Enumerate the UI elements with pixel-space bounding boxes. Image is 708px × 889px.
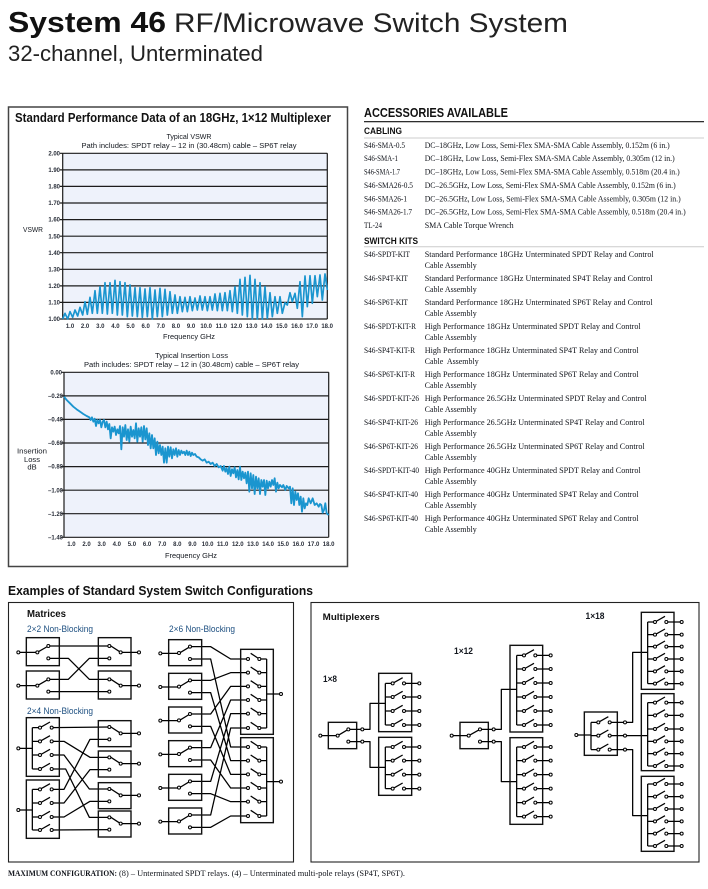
diagram: 1x12 multiplexer <box>450 645 552 824</box>
diagram: 1x8 multiplexer <box>319 673 421 795</box>
switch kits section: High Performance 26.5GHz Unterminated SP4T Relay and Control <box>425 417 645 427</box>
cabling section: DC–18GHz, Low Loss, Semi-Flex SMA-SMA Cable Assembly, 0.305m (12 in.) <box>425 153 675 163</box>
switch kits section: High Performance 40GHz Unterminated SPDT Relay and Control <box>425 465 641 475</box>
switch kits section: High Performance 26.5GHz Unterminated SP6T Relay and Control <box>425 441 645 451</box>
chart: typical VSWR: 11.0 <box>216 324 228 330</box>
chart: typical insertion loss: –1.00 <box>48 488 64 494</box>
chart: typical VSWR: 3.0 <box>96 324 105 330</box>
footnote: maximum configuration: MAXIMUM CONFIGURATION: <box>8 868 117 878</box>
chart: typical VSWR: 14.0 <box>261 324 273 330</box>
diagram: 1x18 multiplexer: 1×18 <box>586 611 604 621</box>
chart: typical VSWR: 1.10 <box>48 300 61 306</box>
chart: typical VSWR: 1.60 <box>48 218 61 224</box>
switch kits section: High Performance 40GHz Unterminated SP6T Relay and Control <box>425 513 639 523</box>
chart: typical VSWR: 5.0 <box>126 324 135 330</box>
chart: typical insertion loss: 17.0 <box>308 542 320 548</box>
cabling section: S46-SMA-1.7 <box>364 166 400 176</box>
switch kits section: Cable Assembly <box>425 332 477 342</box>
switch kits section: S46-SP6T-KIT-40 <box>364 513 418 523</box>
chart: typical insertion loss: 13.0 <box>247 542 259 548</box>
chart: typical insertion loss: 14.0 <box>262 542 275 548</box>
chart: typical insertion loss <box>17 351 335 560</box>
switch kits section: High Performance 18GHz Unterminated SP6T Relay and Control <box>425 369 639 379</box>
switch kits section: Cable Assembly <box>425 500 477 510</box>
chart: typical VSWR: 1.50 <box>48 234 61 240</box>
switch kits section: Cable Assembly <box>425 284 477 294</box>
diagram: 2x2 non-blocking: 2×2 Non-Blocking <box>27 624 93 634</box>
cabling section: DC–26.5GHz, Low Loss, Semi-Flex SMA-SMA Cable Assembly, 0.305m (12 in.) <box>425 194 681 204</box>
switch kits section: Cable Assembly <box>425 428 477 438</box>
chart: typical insertion loss: 8.0 <box>173 542 182 548</box>
switch kits section: Cable Assembly <box>425 452 477 462</box>
chart: typical insertion loss: 6.0 <box>143 542 152 548</box>
switch kits section: S46-SPDT-KIT <box>364 249 411 259</box>
chart: typical insertion loss: 0.00 <box>50 370 63 376</box>
chart: typical insertion loss: –0.20 <box>48 394 64 400</box>
panel: accessories available <box>364 106 704 534</box>
cabling section: S46-SMA26-1 <box>364 194 407 204</box>
chart: typical insertion loss: 7.0 <box>158 542 167 548</box>
title: RF/Microwave Switch System <box>174 8 568 38</box>
chart: typical VSWR: 1.80 <box>48 184 61 190</box>
switch kits section: S46-SP6T-KIT-26 <box>364 441 418 451</box>
chart: typical insertion loss: Typical Insertion Loss <box>155 351 228 360</box>
chart: typical insertion loss: 5.0 <box>128 542 137 548</box>
panel heading: Standard Performance Data of an 18GHz, 1×12 Multiplexer <box>15 111 331 125</box>
switch kits section: S46-SPDT-KIT-26 <box>364 393 419 403</box>
cabling section: SMA Cable Torque Wrench <box>425 220 514 230</box>
diagram: 1x8 multiplexer: 1×8 <box>323 674 337 684</box>
chart: typical insertion loss: 10.0 <box>202 542 214 548</box>
chart: typical insertion loss: Frequency GHz <box>165 551 217 560</box>
diagram: 2x6 non-blocking: 2×6 Non-Blocking <box>169 624 235 634</box>
switch kits section: High Performance 18GHz Unterminated SPDT Relay and Control <box>425 321 641 331</box>
chart: typical VSWR: 17.0 <box>306 324 319 330</box>
diagram: 1x12 multiplexer: 1×12 <box>454 646 473 656</box>
VSWR data trace <box>63 274 327 319</box>
switch kits section: High Performance 40GHz Unterminated SP4T Relay and Control <box>425 489 639 499</box>
chart: typical VSWR: 1.70 <box>48 201 61 207</box>
title: System 46 <box>8 7 166 39</box>
chart: typical VSWR: 6.0 <box>142 324 151 330</box>
panel: multiplexers <box>311 602 699 862</box>
chart: typical insertion loss: –0.60 <box>48 441 64 447</box>
subtitle: 32-channel, Unterminated <box>8 41 263 66</box>
chart: typical insertion loss: –1.20 <box>48 512 64 518</box>
diagram: 2x4 non-blocking <box>17 706 140 838</box>
chart: typical insertion loss: 11.0 <box>217 542 229 548</box>
switch kits section <box>364 236 704 534</box>
chart: typical VSWR: 1.00 <box>48 317 61 323</box>
switch kits section: Standard Performance 18GHz Unterminated SP4T Relay and Control <box>425 273 653 283</box>
switch kits section: S46-SP4T-KIT <box>364 273 409 283</box>
chart: typical VSWR: 13.0 <box>246 324 258 330</box>
switch kits section: S46-SP4T-KIT-40 <box>364 489 418 499</box>
chart: typical VSWR: 7.0 <box>157 324 166 330</box>
chart: typical VSWR: 1.40 <box>48 251 61 257</box>
chart: typical VSWR: 2.0 <box>81 324 90 330</box>
accessories heading: ACCESSORIES AVAILABLE <box>364 106 508 120</box>
chart: typical insertion loss: dB <box>27 462 37 472</box>
chart: typical VSWR: 2.00 <box>48 152 61 158</box>
chart: typical insertion loss: 4.0 <box>113 542 122 548</box>
cabling section: S46-SMA-1 <box>364 153 398 163</box>
switch kits section: Standard Performance 18GHz Unterminated SP6T Relay and Control <box>425 297 653 307</box>
chart: typical VSWR: 12.0 <box>231 324 243 330</box>
diagram: 1x18 multiplexer <box>575 611 683 851</box>
chart: typical insertion loss: 9.0 <box>188 542 197 548</box>
chart: typical VSWR: 10.0 <box>200 324 213 330</box>
chart: typical insertion loss: 15.0 <box>277 542 290 548</box>
switch kits section: Cable Assembly <box>425 380 477 390</box>
chart: typical VSWR: 1.20 <box>48 284 61 290</box>
switch kits section: High Performance 26.5GHz Unterminated SPDT Relay and Control <box>425 393 647 403</box>
cabling section: S46-SMA26-1.7 <box>364 206 412 216</box>
switch kits section: Cable Assembly <box>425 260 477 270</box>
panel: multiplexers: Multiplexers <box>323 612 380 623</box>
title <box>8 7 568 39</box>
switch kits section: High Performance 18GHz Unterminated SP4T Relay and Control <box>425 345 639 355</box>
chart: typical insertion loss: 1.0 <box>67 542 76 548</box>
chart: typical VSWR: 18.0 <box>321 324 334 330</box>
chart: typical VSWR: 1.0 <box>66 324 75 330</box>
chart: typical VSWR: 1.90 <box>48 168 61 174</box>
cabling section: DC–18GHz, Low Loss, Semi-Flex SMA-SMA Cable Assembly, 0.152m (6 in.) <box>425 140 670 150</box>
cabling section: CABLING <box>364 126 402 136</box>
chart: typical VSWR: 1.30 <box>48 267 61 273</box>
chart: typical insertion loss: Loss <box>24 455 40 464</box>
switch kits section: Cable Assembly <box>425 356 479 366</box>
switch kits section: Cable Assembly <box>425 308 477 318</box>
cabling section: S46-SMA-0.5 <box>364 140 405 150</box>
cabling section: DC–18GHz, Low Loss, Semi-Flex SMA-SMA Cable Assembly, 0.518m (20.4 in.) <box>425 166 680 176</box>
cabling section: DC–26.5GHz, Low Loss, Semi-Flex SMA-SMA Cable Assembly, 0.518m (20.4 in.) <box>425 206 686 216</box>
cabling section: S46-SMA26-0.5 <box>364 180 413 190</box>
switch kits section: S46-SPDT-KIT-R <box>364 321 416 331</box>
diagram: 2x4 non-blocking: 2×4 Non-Blocking <box>27 706 93 716</box>
footnote: maximum configuration: (8) – Unterminated SPDT relays. (4) – Unterminated multi-pole relays (SP4T, SP6T). <box>119 868 405 878</box>
chart: typical VSWR: VSWR <box>23 225 43 234</box>
switch kits section: Cable Assembly <box>425 476 477 486</box>
diagram: 2x6 non-blocking <box>159 624 282 834</box>
switch kits section: Cable Assembly <box>425 524 477 534</box>
chart: typical insertion loss: –0.40 <box>48 418 64 424</box>
cabling section <box>364 126 704 230</box>
switch kits section: S46-SP6T-KIT <box>364 297 409 307</box>
chart: typical VSWR: 4.0 <box>111 324 120 330</box>
chart: typical VSWR: Frequency GHz <box>163 332 215 341</box>
switch kits section: S46-SP4T-KIT-R <box>364 345 415 355</box>
diagram: 2x2 non-blocking <box>17 624 140 699</box>
panel: matrices: Matrices <box>27 609 66 620</box>
chart: typical insertion loss: 16.0 <box>293 542 305 548</box>
chart: typical VSWR: 9.0 <box>187 324 196 330</box>
chart: typical insertion loss: –0.80 <box>48 465 64 471</box>
chart: typical insertion loss: 3.0 <box>98 542 107 548</box>
panel: matrices <box>8 602 294 862</box>
heading: switch configurations: Examples of Standard System Switch Configurations <box>8 584 313 598</box>
panel: standard performance data <box>8 107 348 566</box>
chart: typical VSWR: 8.0 <box>172 324 181 330</box>
switch kits section: SWITCH KITS <box>364 236 418 246</box>
chart: typical insertion loss: 12.0 <box>232 542 244 548</box>
chart: typical insertion loss: Path includes: SPDT relay – 12 in (30.48cm) cable – SP6T relay <box>84 360 299 369</box>
switch kits section: S46-SP6T-KIT-R <box>364 369 415 379</box>
switch kits section: Cable Assembly <box>425 404 477 414</box>
chart: typical VSWR <box>23 132 334 341</box>
chart: typical insertion loss: 2.0 <box>82 542 91 548</box>
switch kits section: Standard Performance 18GHz Unterminated SPDT Relay and Control <box>425 249 654 259</box>
chart: typical insertion loss: 18.0 <box>323 542 335 548</box>
chart: typical VSWR: 15.0 <box>276 324 288 330</box>
cabling section: TL-24 <box>364 220 383 230</box>
chart: typical VSWR: 16.0 <box>291 324 303 330</box>
insertion loss data trace <box>64 397 329 515</box>
chart: typical insertion loss: –1.40 <box>48 535 64 541</box>
switch kits section: S46-SPDT-KIT-40 <box>364 465 419 475</box>
chart: typical VSWR: Typical VSWR <box>166 132 212 141</box>
chart: typical insertion loss: Insertion <box>17 446 47 456</box>
chart: typical VSWR: Path includes: SPDT relay – 12 in (30.48cm) cable – SP6T relay <box>82 141 297 150</box>
cabling section: DC–26.5GHz, Low Loss, Semi-Flex SMA-SMA Cable Assembly, 0.152m (6 in.) <box>425 180 676 190</box>
switch kits section: S46-SP4T-KIT-26 <box>364 417 418 427</box>
